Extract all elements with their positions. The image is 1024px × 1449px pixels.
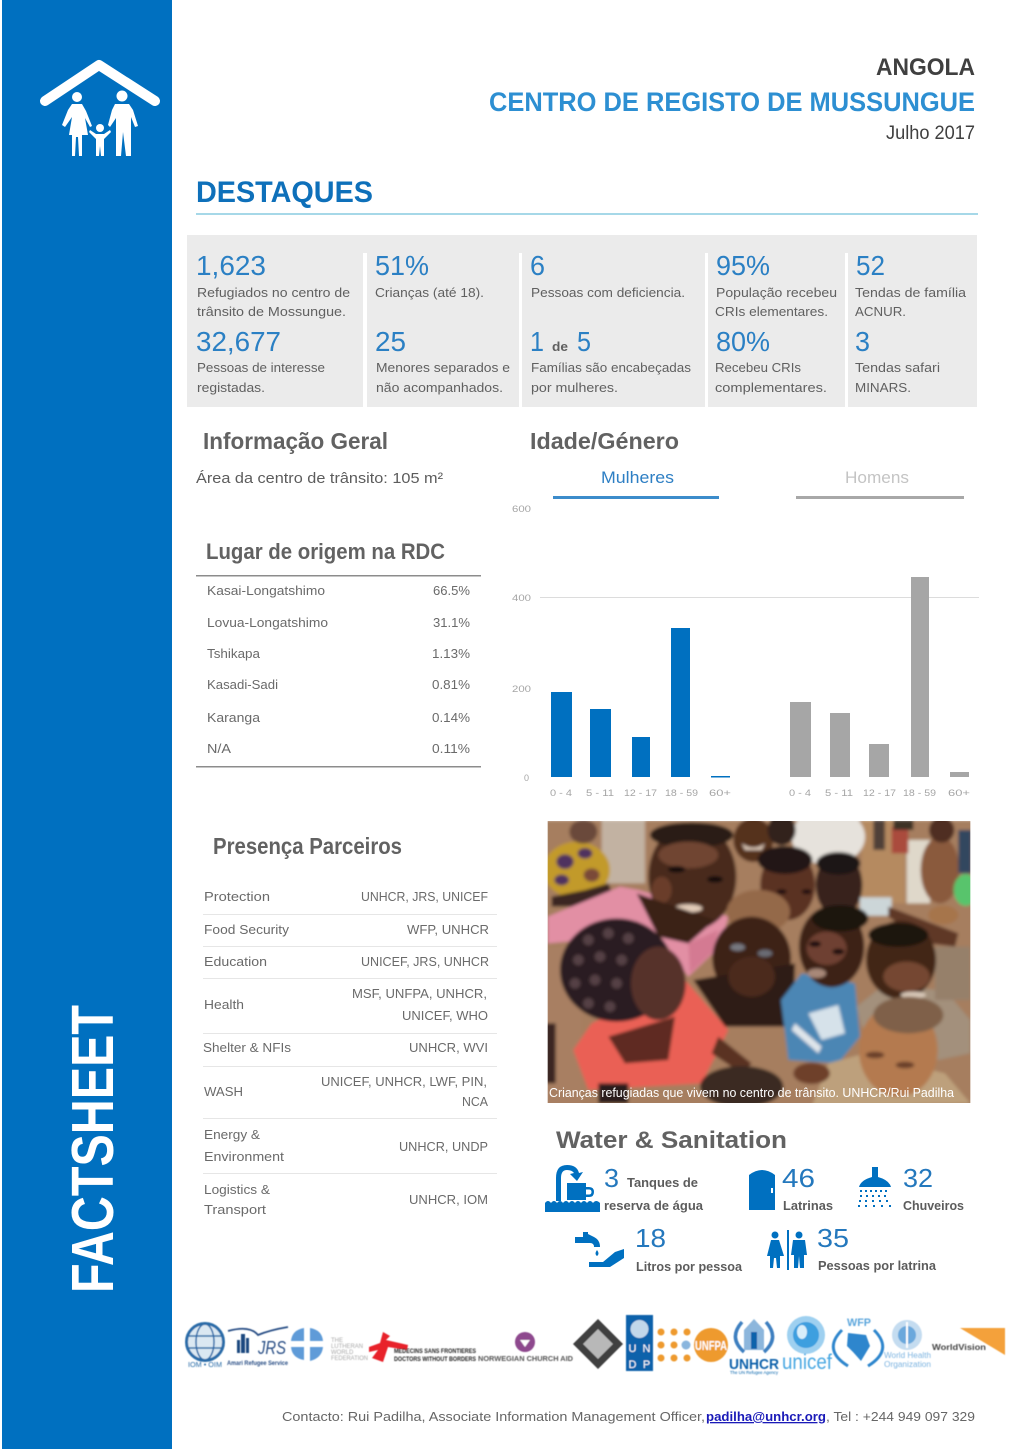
- highlight column: disability and households: 6: [530, 250, 545, 281]
- section: general information: Área da centro de trânsito: 105 m²: [196, 470, 443, 487]
- logo: Lutheran World Federation: THE: [331, 1338, 343, 1344]
- section: general information: [196, 428, 443, 487]
- highlight column: CRIs: 80%: [716, 326, 770, 357]
- table: partner presence: [203, 833, 497, 1217]
- chart axis labels: 0 - 4: [550, 788, 572, 798]
- icon: latrine door: [749, 1170, 775, 1210]
- chart axis labels: 12 - 17: [863, 788, 896, 798]
- partner logos: [186, 1315, 1005, 1375]
- footer: contact: , Tel : +244 949 097 329: [826, 1409, 975, 1424]
- table: place of origin: N/A: [207, 741, 231, 756]
- table: place of origin: Karanga: [207, 710, 261, 725]
- highlight column: disability and households: Famílias são encabeçadas: [531, 360, 692, 375]
- photo: refugee children: [543, 808, 978, 1107]
- highlight column: CRIs: Recebeu CRIs: [715, 360, 801, 375]
- chart axis labels: 18 - 59: [903, 788, 936, 798]
- vertical label: factsheet: FACTSHEET: [60, 1005, 126, 1293]
- logo: JRS: Amari Refugee Service: [227, 1361, 289, 1367]
- title block: ANGOLA: [876, 54, 975, 81]
- sidebar: [2, 0, 172, 1449]
- table: partner presence: Protection: [204, 889, 270, 904]
- table: partner presence: UNHCR, JRS, UNICEF: [361, 889, 488, 904]
- chart axis labels: [512, 504, 979, 798]
- stat: latrines: 46: [782, 1163, 815, 1193]
- logo: IOM: [186, 1324, 224, 1369]
- table: partner presence: UNICEF, JRS, UNHCR: [361, 954, 489, 969]
- logo: MSF: MEDECINS SANS FRONTIERES: [394, 1348, 477, 1355]
- logo: WHO: [884, 1320, 931, 1369]
- table: place of origin: 1.13%: [432, 646, 470, 661]
- highlight column: disability and households: por mulheres.: [531, 380, 618, 395]
- red shirt child: [573, 980, 728, 1090]
- highlight column: refugees: trânsito de Mossungue.: [197, 304, 346, 319]
- stat: showers: [903, 1163, 964, 1213]
- logo: UNDP: U: [629, 1343, 637, 1355]
- stat: latrines: [782, 1163, 833, 1213]
- logo: World Vision: WorldVision: [932, 1342, 986, 1352]
- highlight column: CRIs: População recebeu: [716, 285, 837, 300]
- highlight column: refugees: Pessoas de interesse: [197, 360, 325, 375]
- table: partner presence: UNHCR, IOM: [409, 1192, 488, 1207]
- highlight column: disability and households: [530, 250, 692, 395]
- table: place of origin: 66.5%: [433, 583, 470, 598]
- table: partner presence: Logistics &: [204, 1182, 270, 1197]
- table: partner presence: Transport: [204, 1202, 266, 1217]
- icon: tap and hand: [575, 1232, 624, 1267]
- pink shirt: [548, 887, 728, 977]
- logo: Lutheran World Federation: [291, 1328, 368, 1362]
- table: place of origin: 0.11%: [432, 741, 470, 756]
- highlight column: CRIs: complementares.: [715, 380, 827, 395]
- logo: UNHCR: The UN Refugee Agency: [730, 1370, 779, 1375]
- stat: latrines: Latrinas: [783, 1198, 833, 1213]
- highlight column: disability and households: 1: [530, 326, 544, 357]
- highlight column: children: não acompanhados.: [376, 380, 503, 395]
- section: water and sanitation: Water & Sanitation: [556, 1127, 787, 1154]
- highlight column: children: 51%: [375, 250, 429, 281]
- legend: women: [553, 468, 719, 499]
- highlight column: disability and households: de: [552, 339, 568, 354]
- chart axis labels: 60+: [948, 788, 970, 798]
- table: place of origin: 0.14%: [432, 710, 470, 725]
- highlight column: refugees: 32,677: [196, 326, 281, 357]
- stat: reserve tanks: Tanques de: [627, 1175, 698, 1190]
- stat: reserve tanks: 3: [604, 1163, 619, 1193]
- highlight column: CRIs: 95%: [716, 250, 770, 281]
- logo: IOM: IOM • OIM: [188, 1362, 222, 1369]
- table: partner presence: UNHCR, UNDP: [399, 1139, 488, 1154]
- stat: showers: Chuveiros: [903, 1198, 964, 1213]
- footer: contact: padilha@unhcr.org: [706, 1409, 826, 1424]
- legend: men: Homens: [845, 468, 909, 487]
- photo: refugee children: Crianças refugiadas que vivem no centro de trânsito. UNHCR/Rui Padilha: [549, 1085, 955, 1100]
- logo: Lutheran World Federation: LUTHERAN: [331, 1344, 363, 1350]
- highlight column: refugees: registadas.: [197, 380, 265, 395]
- chart axis labels: 60+: [709, 788, 731, 798]
- heading: destaques: DESTAQUES: [196, 176, 373, 209]
- logo: Norwegian Church Aid: [478, 1332, 573, 1363]
- highlight column: CRIs: [715, 250, 837, 395]
- title block: Julho 2017: [886, 123, 975, 144]
- highlight column: tents: Tendas de família: [855, 285, 967, 300]
- table: partner presence: Environment: [204, 1149, 284, 1164]
- logo: UNDP: [626, 1315, 653, 1371]
- table: place of origin: Tshikapa: [207, 646, 261, 661]
- table: partner presence: MSF, UNFPA, UNHCR,: [352, 986, 487, 1001]
- icon: woman and man: [767, 1230, 807, 1270]
- stat: litres per person: [635, 1223, 743, 1274]
- table: partner presence: Presença Parceiros: [213, 833, 402, 859]
- chart axis labels: 5 - 11: [825, 788, 853, 798]
- logo: WHO: Organization: [884, 1360, 931, 1369]
- table: place of origin: 31.1%: [433, 615, 470, 630]
- stat: people per latrine: [817, 1223, 937, 1273]
- logo: Lutheran World Federation: WORLD: [331, 1350, 354, 1356]
- icon: water tank with tap: [545, 1165, 600, 1212]
- heading: age and gender: Idade/Género: [530, 428, 679, 454]
- table: partner presence: Food Security: [204, 922, 290, 937]
- highlight column: children: 25: [375, 326, 406, 357]
- logo: JRS: [227, 1327, 289, 1367]
- highlight column: children: Crianças (até 18).: [375, 285, 484, 300]
- chart: age and gender bars: [512, 468, 979, 798]
- stat: showers: 32: [903, 1163, 933, 1193]
- title block: [489, 54, 975, 144]
- back row: [789, 821, 868, 866]
- table: place of origin: 0.81%: [432, 677, 470, 692]
- table: partner presence: WFP, UNHCR: [407, 922, 489, 937]
- table: partner presence: NCA: [462, 1094, 488, 1109]
- section: general information: Informação Geral: [203, 428, 388, 454]
- highlight column: tents: Tendas safari: [855, 360, 940, 375]
- table: place of origin: Kasadi-Sadi: [207, 677, 278, 692]
- highlight column: tents: MINARS.: [855, 380, 911, 395]
- logo: WFP: [833, 1317, 883, 1366]
- chart axis labels: 200: [512, 684, 531, 694]
- highlight column: refugees: [196, 250, 350, 395]
- bottom right child: [812, 1053, 970, 1107]
- logo: WFP: WFP: [847, 1317, 871, 1329]
- highlight column: CRIs: CRIs elementares.: [715, 304, 828, 319]
- table: partner presence: Shelter & NFIs: [203, 1040, 292, 1055]
- footer: contact: [282, 1409, 975, 1424]
- legend: women: Mulheres: [601, 468, 674, 487]
- chart axis labels: 5 - 11: [586, 788, 614, 798]
- logo: UNHCR: [729, 1319, 779, 1375]
- patterned child left: [543, 842, 610, 898]
- right child: [857, 987, 970, 1060]
- bars: women: [551, 628, 730, 778]
- main face: [646, 840, 738, 928]
- logo: MSF: DOCTORS WITHOUT BORDERS: [394, 1356, 477, 1363]
- stat: reserve tanks: reserva de água: [604, 1198, 704, 1213]
- highlight column: disability and households: 5: [577, 326, 591, 357]
- icon: shower: [858, 1167, 891, 1207]
- logo: WHO: World Health: [884, 1351, 931, 1360]
- table: partner presence: Energy &: [204, 1127, 260, 1142]
- stat: reserve tanks: [604, 1163, 704, 1213]
- table: place of origin: [196, 539, 481, 768]
- chart axis labels: 600: [512, 504, 531, 514]
- chart axis labels: 0: [524, 773, 529, 783]
- footer: contact: Contacto: Rui Padilha, Associate Information Management Officer,: [282, 1409, 705, 1424]
- logo: UNICEF: unicef: [782, 1351, 832, 1374]
- logo: UNDP: P: [643, 1359, 650, 1371]
- highlight column: disability and households: Pessoas com deficiencia.: [531, 285, 685, 300]
- blue shirt child: [781, 973, 860, 1063]
- logo: World Vision: [932, 1328, 1005, 1355]
- chart axis labels: 18 - 59: [665, 788, 698, 798]
- right back: [907, 840, 930, 903]
- table: place of origin: Lugar de origem na RDC: [206, 539, 445, 564]
- logo: UNHCR: UNHCR: [729, 1356, 779, 1373]
- highlight column: children: Menores separados e: [376, 360, 510, 375]
- highlight column: refugees: Refugiados no centro de: [197, 285, 350, 300]
- logo: diamond emblem: [573, 1319, 623, 1369]
- table: partner presence: WASH: [204, 1084, 243, 1099]
- table: place of origin: Kasai-Longatshimo: [207, 583, 325, 598]
- logo: Lutheran World Federation: FEDERATION: [331, 1356, 368, 1362]
- highlight column: tents: 3: [855, 326, 870, 357]
- table: partner presence: Education: [204, 954, 267, 969]
- middle child: [727, 890, 790, 933]
- logo: UNDP: D: [629, 1359, 637, 1371]
- table: place of origin: Lovua-Longatshimo: [207, 615, 328, 630]
- back kids: [758, 864, 818, 922]
- stat: people per latrine: 35: [817, 1223, 849, 1253]
- logo: UNDP: N: [643, 1343, 651, 1355]
- chart axis labels: 400: [512, 593, 531, 603]
- table: partner presence: UNICEF, UNHCR, LWF, PIN,: [321, 1074, 487, 1089]
- bars: men: [790, 577, 969, 777]
- highlight column: tents: 52: [856, 250, 885, 281]
- highlight column: children: [375, 250, 510, 395]
- stat: people per latrine: Pessoas por latrina: [818, 1258, 937, 1273]
- logo: JRS: JRS: [257, 1338, 286, 1358]
- logo: Norwegian Church Aid: NORWEGIAN CHURCH AID: [478, 1356, 573, 1363]
- chart axis labels: 0 - 4: [789, 788, 811, 798]
- legend: men: [796, 468, 964, 499]
- logo: UNICEF: [782, 1316, 832, 1374]
- chart axis labels: 12 - 17: [624, 788, 657, 798]
- section: water and sanitation: [545, 1127, 964, 1274]
- logo: UNFPA: UNFPA: [695, 1338, 727, 1353]
- title block: CENTRO DE REGISTO DE MUSSUNGUE: [489, 87, 975, 117]
- table: partner presence: UNHCR, WVI: [409, 1040, 488, 1055]
- icon: house and family logo: [45, 65, 155, 156]
- table: partner presence: Health: [204, 997, 244, 1012]
- highlight column: tents: ACNUR.: [855, 304, 906, 319]
- highlight column: refugees: 1,623: [196, 250, 266, 281]
- stat: litres per person: Litros por pessoa: [636, 1259, 743, 1274]
- highlight column: tents: [855, 250, 967, 395]
- logo: MSF: [369, 1332, 477, 1363]
- stat: litres per person: 18: [635, 1223, 666, 1253]
- logo: UNFPA: [658, 1328, 728, 1362]
- panel: highlights: [187, 235, 977, 407]
- table: partner presence: UNICEF, WHO: [402, 1008, 488, 1023]
